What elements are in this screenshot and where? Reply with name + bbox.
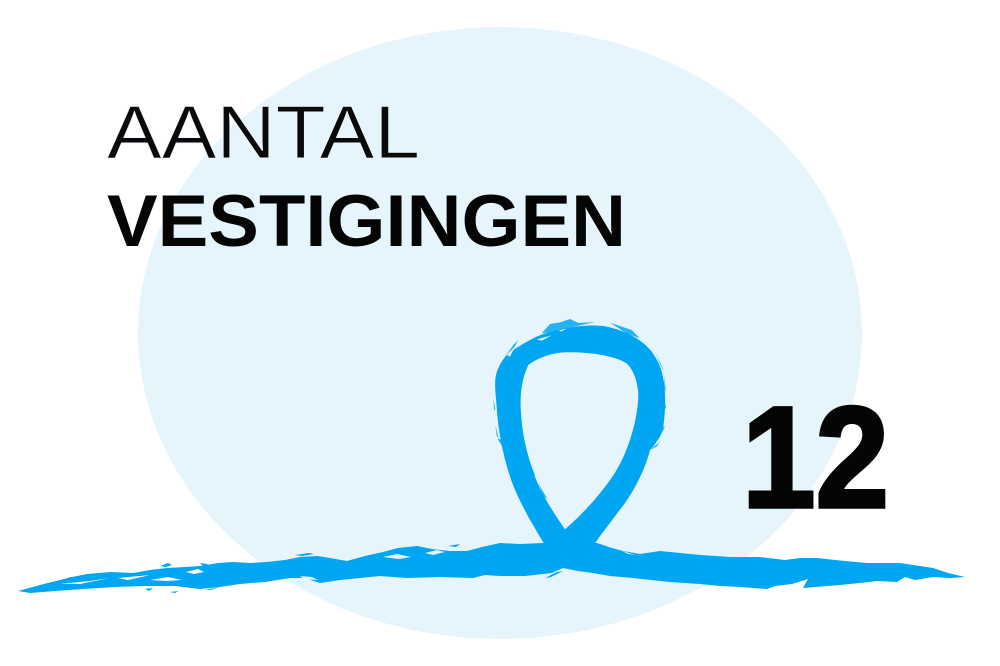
title line: vestigingen: VESTIGINGEN xyxy=(107,181,626,262)
icon: brush ribbon xyxy=(18,319,965,593)
title xyxy=(107,90,626,262)
number of locations: 12 xyxy=(742,377,889,538)
brush stroke: loop xyxy=(493,319,666,567)
brush stroke: horizontal line xyxy=(18,542,965,593)
loop flecks xyxy=(493,319,666,515)
brush flecks xyxy=(32,544,563,593)
brush slits xyxy=(60,569,204,584)
background circle xyxy=(138,27,862,639)
title line: aantal: AANTAL xyxy=(107,90,420,174)
